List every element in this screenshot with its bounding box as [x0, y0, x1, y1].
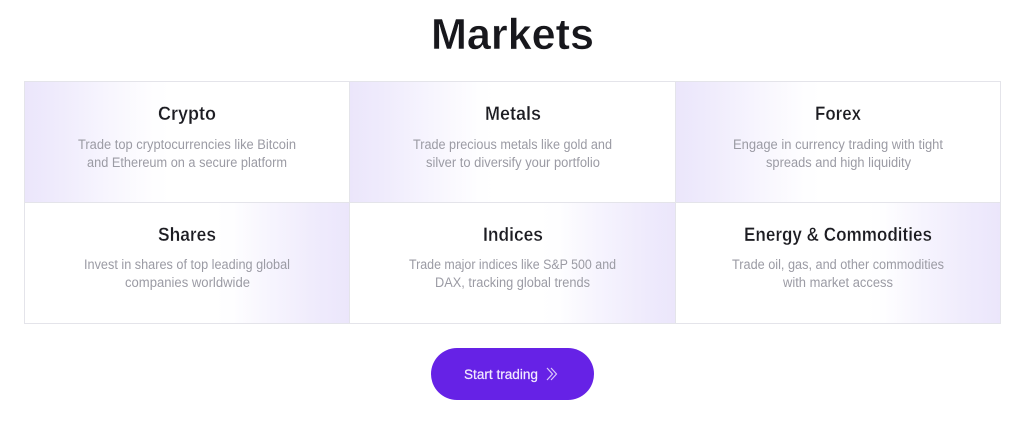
heading: shares: Shares	[158, 225, 216, 246]
text: metals description: Trade precious metals like gold and	[413, 137, 612, 152]
panel: shares	[24, 202, 350, 324]
text: indices description: DAX, tracking global trends	[435, 275, 590, 290]
text: metals description	[413, 137, 612, 170]
text: forex description	[733, 137, 943, 170]
text: crypto description: and Ethereum on a secure platform	[87, 155, 287, 170]
heading: forex: Forex	[815, 104, 861, 125]
panel: markets grid	[24, 82, 1000, 324]
panel: forex	[676, 82, 1000, 202]
text: shares description: companies worldwide	[125, 275, 250, 290]
text: indices description: Trade major indices like S&P 500 and	[409, 257, 616, 272]
icon: double chevron	[547, 368, 556, 380]
text: energy and commodities description: with market access	[782, 275, 893, 290]
button label: Start trading	[464, 367, 538, 382]
text: indices description	[409, 257, 616, 290]
panel: energy and commodities	[676, 202, 1000, 324]
text: forex description: spreads and high liquidity	[766, 155, 911, 170]
text: energy and commodities description: Trade oil, gas, and other commodities	[732, 257, 944, 272]
text: crypto description: Trade top cryptocurrencies like Bitcoin	[78, 137, 296, 152]
heading: indices: Indices	[483, 225, 543, 246]
panel: indices	[350, 202, 676, 324]
text: crypto description	[78, 137, 296, 170]
heading: metals: Metals	[485, 104, 541, 125]
panel: crypto	[24, 82, 350, 202]
text: forex description: Engage in currency trading with tight	[733, 137, 943, 152]
text: energy and commodities description	[732, 257, 944, 290]
text: shares description: Invest in shares of top leading global	[84, 257, 290, 272]
title: Markets	[431, 10, 594, 59]
heading: crypto: Crypto	[158, 104, 216, 125]
button: start trading	[431, 348, 594, 400]
text: metals description: silver to diversify your portfolio	[426, 155, 600, 170]
panel: metals	[350, 82, 676, 202]
heading: energy and commodities: Energy & Commodities	[744, 225, 932, 246]
text: shares description	[84, 257, 290, 290]
